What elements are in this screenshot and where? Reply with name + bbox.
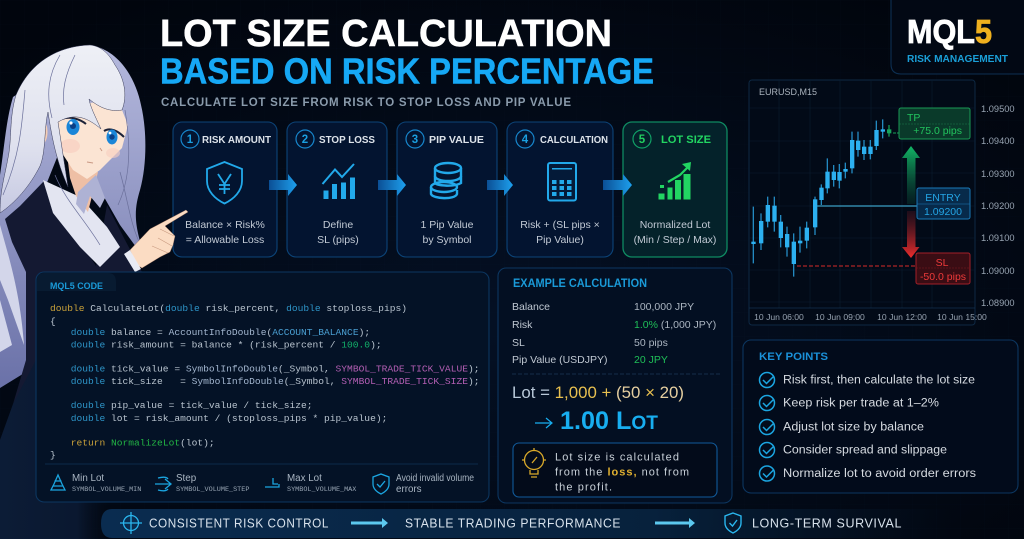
min lot label: SYMBOL_VOLUME_MIN: [72, 486, 141, 494]
icon: shield check: [373, 474, 389, 494]
time axis: 10 Jun 09:00: [815, 312, 865, 322]
panel: step 1 risk amount: = Allowable Loss: [186, 234, 264, 246]
volume error note: Avoid invalid volume: [396, 473, 474, 484]
candlesticks: [751, 119, 891, 277]
panel: step 2 stop loss: [287, 122, 387, 257]
title: [160, 13, 654, 109]
icon: crosshair: [120, 512, 142, 534]
chart symbol: EURUSD,M15: [759, 87, 817, 97]
logo panel: MQL5 risk management: [891, 0, 1024, 74]
panel: step 2 stop loss: Define: [323, 219, 353, 231]
lower hair highlights: [0, 225, 24, 352]
footer: long-term survival: LONG-TERM SURVIVAL: [752, 516, 902, 530]
example heading: EXAMPLE CALCULATION: [513, 278, 647, 290]
take profit line: [893, 132, 899, 134]
entry label: 1.09200: [924, 206, 962, 218]
subtitle: CALCULATE LOT SIZE FROM RISK TO STOP LOSS AND PIP VALUE: [161, 97, 571, 109]
title line 2: BASED ON RISK PERCENTAGE: [160, 50, 654, 92]
code listing: double risk_amount = balance * (risk_percent / 100.0);: [71, 340, 382, 350]
hair strands: [3, 55, 142, 248]
panel: step 1 risk amount: Balance × Risk%: [185, 219, 265, 231]
code listing: }: [50, 450, 56, 460]
time axis: 10 Jun 06:00: [754, 312, 804, 322]
input rows: Risk: [512, 319, 533, 331]
panel: key points: [743, 340, 1018, 493]
take profit label: [899, 108, 970, 139]
code heading: MQL5 CODE: [50, 281, 103, 292]
code listing: double pip_value = tick_value / tick_size;: [71, 400, 313, 411]
point 2: Keep risk per trade at 1–2%: [783, 398, 939, 410]
entry label: ENTRY: [925, 192, 961, 204]
neck: [68, 162, 98, 212]
time axis: 10 Jun 15:00: [937, 312, 987, 322]
panel: step 4 calculation: CALCULATION: [540, 135, 608, 146]
icon: calculator: [548, 163, 576, 200]
point 1: Risk first, then calculate the lot size: [783, 374, 975, 386]
code listing: {: [50, 316, 56, 327]
panel: step 4 calculation: Risk + (SL pips ×: [520, 219, 600, 231]
panel: example calculation: [498, 268, 732, 503]
logo subtitle: RISK MANAGEMENT: [907, 53, 1009, 65]
icon: min lot cone: [51, 475, 65, 490]
point 4: [760, 442, 947, 458]
arrow: step 2 to 3: [378, 174, 406, 196]
arrow: up to take profit: [902, 146, 920, 204]
arrow: step 3 to 4: [487, 174, 513, 196]
footer: stable trading performance: STABLE TRADING PERFORMANCE: [405, 516, 621, 530]
icon: footer shield: [725, 513, 741, 533]
eyes: [62, 118, 124, 144]
input rows: Pip Value (USDJPY): [512, 354, 608, 366]
shirt: [43, 180, 120, 267]
collar: [76, 175, 105, 214]
panel: step 5 lot size: (Min / Step / Max): [634, 234, 716, 246]
front hair: [0, 45, 125, 213]
back hair: [0, 45, 147, 388]
title line 1: LOT SIZE CALCULATION: [160, 13, 612, 55]
input rows: 20 JPY: [634, 354, 668, 366]
time axis: 10 Jun 12:00: [877, 312, 927, 322]
max lot label: Max Lot: [287, 473, 322, 484]
arrow: footer second: [655, 518, 695, 528]
icon: yen shield: [207, 162, 242, 204]
entry line: [817, 205, 917, 207]
step label: SYMBOL_VOLUME_STEP: [176, 486, 249, 494]
point 3: Adjust lot size by balance: [783, 422, 924, 434]
code listing: double CalculateLot(double risk_percent, double stoploss_pips): [50, 303, 407, 314]
point 1: [760, 372, 975, 388]
formula: Lot = 1,000 + (50 × 20): [512, 383, 684, 402]
code listing: double tick_value = SymbolInfoDouble(_Symbol, SYMBOL_TRADE_TICK_VALUE);: [71, 364, 479, 374]
panel: step 5 lot size: LOT SIZE: [661, 134, 711, 146]
panel: step 5 lot size: 5: [639, 134, 646, 146]
price axis: 1.09400: [981, 136, 1015, 146]
skirt and lower jacket: [0, 355, 110, 539]
code listing: double lot = risk_amount / (stoploss_pips * pip_value);: [71, 413, 387, 424]
point 5: [760, 466, 976, 481]
icon: max lot: [265, 478, 279, 487]
panel: step 3 pip value: 1 Pip Value: [421, 219, 474, 231]
icon: step arrow: [155, 477, 171, 491]
step label: [176, 473, 249, 494]
max lot label: [287, 473, 356, 494]
price axis: [981, 104, 1015, 308]
panel: step 4 calculation: Pip Value): [536, 234, 584, 246]
panel: step 1 risk amount: [173, 122, 277, 257]
character: anime woman in suit: [0, 45, 147, 539]
point 2: [760, 396, 939, 410]
price axis: 1.08900: [981, 298, 1015, 308]
price axis: 1.09100: [981, 233, 1015, 243]
input rows: 100,000 JPY: [634, 301, 694, 313]
footer: consistent risk control: CONSISTENT RISK CONTROL: [149, 516, 329, 530]
input rows: [512, 301, 716, 366]
panel: step 1 risk amount: 1: [187, 134, 194, 146]
price axis: 1.09500: [981, 104, 1015, 114]
arrow: down to stop loss: [902, 211, 920, 258]
shirt cuff: [124, 250, 141, 272]
panel: step 3 pip value: 3: [412, 134, 418, 146]
code listing: return NormalizeLot(lot);: [71, 438, 215, 448]
volume error note: [396, 473, 474, 495]
nose and mouth: [87, 148, 102, 163]
point 5: Normalize lot to avoid order errors: [783, 468, 976, 480]
panel: candlestick chart: [749, 80, 1015, 325]
footer banner: [101, 509, 952, 538]
code listing: double balance = AccountInfoDouble(ACCOUNT_BALANCE);: [71, 327, 370, 338]
logo wordmark: MQL5: [907, 13, 992, 50]
stop loss line: [797, 265, 916, 267]
stop loss label: -50.0 pips: [920, 271, 966, 283]
panel: step 3 pip value: PIP VALUE: [429, 135, 484, 146]
tip box: the profit.: [555, 482, 612, 494]
point 4: Consider spread and slippage: [783, 444, 947, 456]
panel: step 2 stop loss: SL (pips): [317, 234, 359, 246]
max lot label: SYMBOL_VOLUME_MAX: [287, 486, 356, 494]
price axis: 1.09300: [981, 169, 1015, 179]
price axis: 1.09000: [981, 266, 1015, 276]
time axis: [754, 312, 987, 322]
volume error note: errors: [396, 484, 422, 495]
take profit label: TP: [907, 112, 920, 124]
panel: step 3 pip value: [397, 122, 497, 257]
price axis: 1.09200: [981, 201, 1015, 211]
panel: step 4 calculation: [507, 122, 613, 257]
panel: step 2 stop loss: STOP LOSS: [319, 135, 375, 146]
min lot label: [72, 473, 141, 494]
tip box: Lot size is calculated: [555, 452, 679, 464]
step label: Step: [176, 473, 197, 484]
min lot label: Min Lot: [72, 473, 104, 484]
take profit label: +75.0 pips: [913, 125, 962, 137]
face: [57, 100, 128, 179]
panel: step 1 risk amount: RISK AMOUNT: [202, 135, 271, 146]
tip box: from the loss, not from: [555, 466, 689, 478]
suit jacket: [5, 181, 142, 404]
arrow: footer first: [351, 518, 388, 528]
result: 1.00 LOT: [560, 407, 658, 435]
icon: rising bars: [322, 164, 355, 199]
tip box: [513, 443, 717, 497]
panel: step 4 calculation: 4: [522, 134, 529, 146]
panel: step 5 lot size: Normalized Lot: [640, 219, 710, 231]
ear: [36, 120, 48, 144]
arrow: step 4 to 5: [603, 174, 632, 196]
entry label: [917, 188, 970, 219]
stop loss label: [916, 253, 970, 284]
panel: step 5 lot size: [623, 122, 727, 257]
panel: step 3 pip value: by Symbol: [422, 234, 472, 246]
icon: light bulb: [522, 448, 546, 477]
panel: MQL5 code: [36, 272, 489, 502]
stop loss label: SL: [936, 257, 949, 269]
point 3: [760, 420, 924, 434]
panel: step 2 stop loss: 2: [302, 134, 308, 146]
input rows: 1.0% (1,000 JPY): [634, 319, 716, 331]
arrow: step 1 to 2: [269, 174, 297, 196]
icon: coin stack: [431, 163, 461, 198]
code listing: [50, 303, 479, 460]
icon: green growth bars: [658, 162, 691, 200]
input rows: SL: [512, 337, 525, 349]
input rows: Balance: [512, 301, 550, 313]
input rows: 50 pips: [634, 337, 668, 349]
key points heading: KEY POINTS: [759, 351, 828, 363]
code listing: double tick_size = SymbolInfoDouble(_Symbol, SYMBOL_TRADE_TICK_SIZE);: [71, 376, 479, 387]
hand: pointing at step 1: [124, 210, 188, 272]
